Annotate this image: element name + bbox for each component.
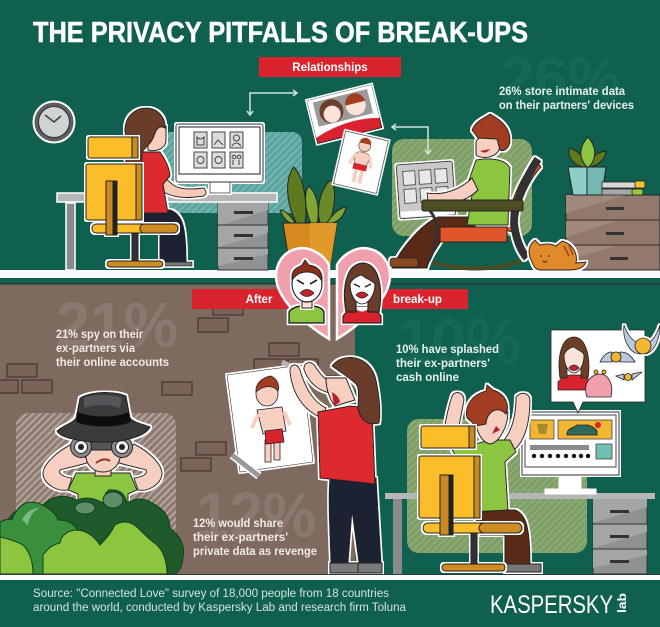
man in rocking chair	[390, 114, 541, 268]
text: 26% store intimate data: on their partners' devices	[499, 100, 634, 112]
poster of man in underwear	[227, 365, 313, 472]
bottom right desk	[385, 493, 655, 575]
label: break-up	[375, 289, 468, 309]
potted plant centre	[280, 167, 346, 268]
broken heart: left half with man	[276, 248, 329, 339]
plant on dresser	[568, 137, 606, 195]
hatched panel: behind desk bottom right	[407, 419, 587, 553]
percent 26 ghost: 26%	[501, 45, 621, 114]
arrow: from monitor to photos	[247, 90, 297, 115]
text: 10% splashed	[396, 344, 499, 384]
stacked books	[602, 181, 645, 195]
percent 21 ghost: 21%	[56, 289, 178, 361]
photo: couple in bed	[307, 85, 382, 144]
panel: break-up brown wall	[0, 284, 355, 575]
text: 12% share	[193, 518, 317, 558]
speech bubble with crying woman and flying money	[551, 330, 645, 413]
hatched panel: teal behind monitor	[160, 132, 302, 213]
text: 21% spy: ex-partners via	[56, 343, 136, 355]
icon: large winged coin	[624, 325, 660, 354]
text: 12% share: private data as revenge	[193, 546, 317, 558]
text: 12% share: 12% would share	[193, 518, 283, 530]
percent 10 ghost: 10%	[397, 305, 521, 377]
text: 12% share: their ex-partners'	[193, 532, 288, 544]
text: 10% splashed: cash online	[396, 372, 459, 384]
yellow office chair right	[419, 426, 522, 571]
man with raised arms	[444, 385, 541, 572]
broken heart: right half with woman	[337, 248, 390, 339]
label: Relationships	[259, 57, 401, 77]
text: 10% splashed: their ex-partners'	[396, 358, 490, 370]
icon: orange cat	[529, 240, 586, 270]
percent 12 ghost: 12%	[196, 479, 316, 551]
tablet	[396, 161, 456, 219]
label: After: After	[246, 294, 273, 306]
arrow: from tablet to photos	[392, 124, 431, 154]
monitor with photo icons	[176, 124, 263, 193]
source text	[33, 588, 407, 614]
dresser	[566, 195, 660, 270]
text: 26% store intimate data	[499, 86, 634, 112]
label: Relationships: Relationships	[292, 62, 368, 74]
text: 10% splashed: 10% have splashed	[396, 344, 499, 356]
woman hanging the poster	[290, 357, 382, 573]
tape on poster	[232, 362, 299, 476]
left desk with drawers	[57, 193, 277, 270]
floor band	[0, 270, 660, 284]
Kaspersky lab logo: KASPERSKY	[490, 591, 613, 619]
hatched panel: behind spy	[16, 413, 176, 548]
label: break-up: break-up	[393, 294, 442, 306]
title: THE PRIVACY PITFALLS OF BREAK-UPS	[33, 17, 528, 49]
footer band	[0, 574, 660, 627]
monitor with online shop	[522, 412, 619, 493]
seated woman at desk	[125, 108, 206, 266]
label: After	[192, 289, 297, 309]
hatched panel: green behind rocking chair	[392, 139, 532, 236]
text: 21% spy	[56, 329, 169, 369]
icon: wall clock	[34, 102, 74, 142]
spy with hat and binoculars	[43, 392, 162, 510]
yellow office chair left	[86, 137, 178, 267]
source text: around the world, conducted by Kaspersky Lab and research firm Toluna	[33, 602, 407, 614]
Kaspersky lab logo: lab	[615, 593, 629, 613]
source text: Source: "Connected Love" survey of 18,000 people from 18 countries	[33, 588, 389, 600]
green bush	[0, 490, 183, 574]
photo: man in underwear	[333, 131, 388, 193]
text: 21% spy: 21% spy on their	[56, 329, 143, 341]
text: 21% spy: their online accounts	[56, 357, 169, 369]
text: 26% store intimate data: 26% store intimate data	[499, 86, 626, 98]
